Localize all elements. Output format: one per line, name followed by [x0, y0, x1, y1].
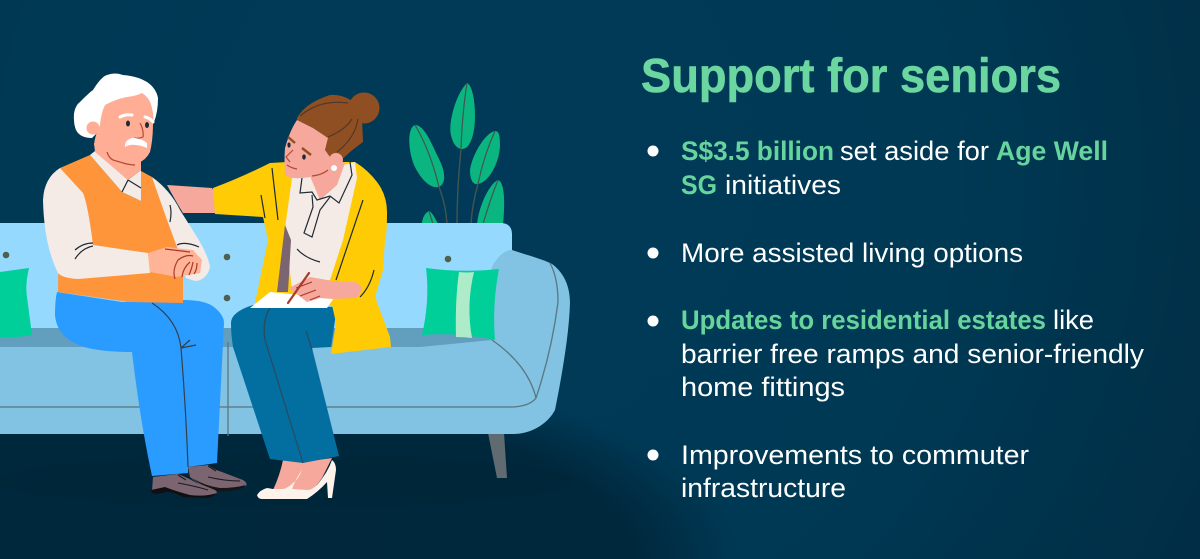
- bullet: age well funding: initiatives: [725, 170, 841, 200]
- woman hair: [297, 92, 380, 162]
- woman blouse: [285, 162, 357, 290]
- man shirt sleeve: [43, 168, 150, 279]
- woman neck and collar: [300, 157, 352, 237]
- plant: [409, 83, 504, 224]
- bullet: residential estates: Updates to residential estates: [681, 305, 1046, 335]
- sofa seat and arm: [0, 250, 570, 434]
- bullet: age well funding: Age Well: [996, 136, 1108, 166]
- woman trousers: [231, 305, 339, 463]
- sofa seams: [0, 263, 558, 436]
- bullet: age well funding: [648, 136, 1108, 200]
- bullet: residential estates: like: [1053, 305, 1094, 335]
- man shoes: [151, 465, 247, 498]
- bullet: residential estates: [648, 305, 1145, 402]
- right pillow: [422, 268, 499, 340]
- sofa backrest: [0, 223, 512, 345]
- man arm far sleeve: [152, 177, 210, 281]
- bullet: commuter infrastructure: [648, 440, 1029, 503]
- man hair: [74, 74, 158, 138]
- woman cardigan: [213, 162, 391, 354]
- woman undershirt: [277, 225, 291, 292]
- woman feet: [273, 458, 332, 490]
- man neck: [94, 143, 141, 180]
- woman arm on shoulder: [167, 185, 220, 213]
- man hands: [148, 247, 202, 279]
- woman cardigan lines: [261, 168, 374, 297]
- man creases: [75, 205, 199, 259]
- bullet: residential estates: barrier free ramps and senior-friendly: [681, 339, 1145, 369]
- bullet: age well funding: S$3.5 billion: [681, 136, 834, 166]
- bullet: commuter infrastructure: infrastructure: [681, 473, 846, 503]
- woman writing hand: [289, 277, 362, 302]
- man: [43, 74, 247, 498]
- man vest: [58, 155, 183, 303]
- bullet: commuter infrastructure: Improvements to commuter: [681, 440, 1029, 470]
- bullet: age well funding: SG: [681, 170, 717, 200]
- sofa leg: [488, 433, 507, 478]
- man collar: [90, 151, 141, 201]
- sofa seat shadow: [0, 328, 500, 348]
- sofa buttons: [3, 252, 451, 301]
- man trousers: [55, 292, 224, 476]
- clipboard paper: [250, 292, 334, 308]
- title: Support for seniors: [641, 50, 1061, 103]
- sofa: [0, 223, 570, 478]
- bullet: assisted living: More assisted living options: [681, 238, 1023, 268]
- left pillow: [0, 268, 32, 337]
- man face: [86, 93, 153, 166]
- bullet: residential estates: home fittings: [681, 372, 845, 402]
- woman face: [284, 120, 343, 178]
- woman heels: [257, 460, 336, 499]
- floor: [0, 369, 740, 559]
- woman: [213, 92, 391, 499]
- bullet: age well funding: set aside for: [840, 136, 989, 166]
- pencil: [288, 273, 309, 303]
